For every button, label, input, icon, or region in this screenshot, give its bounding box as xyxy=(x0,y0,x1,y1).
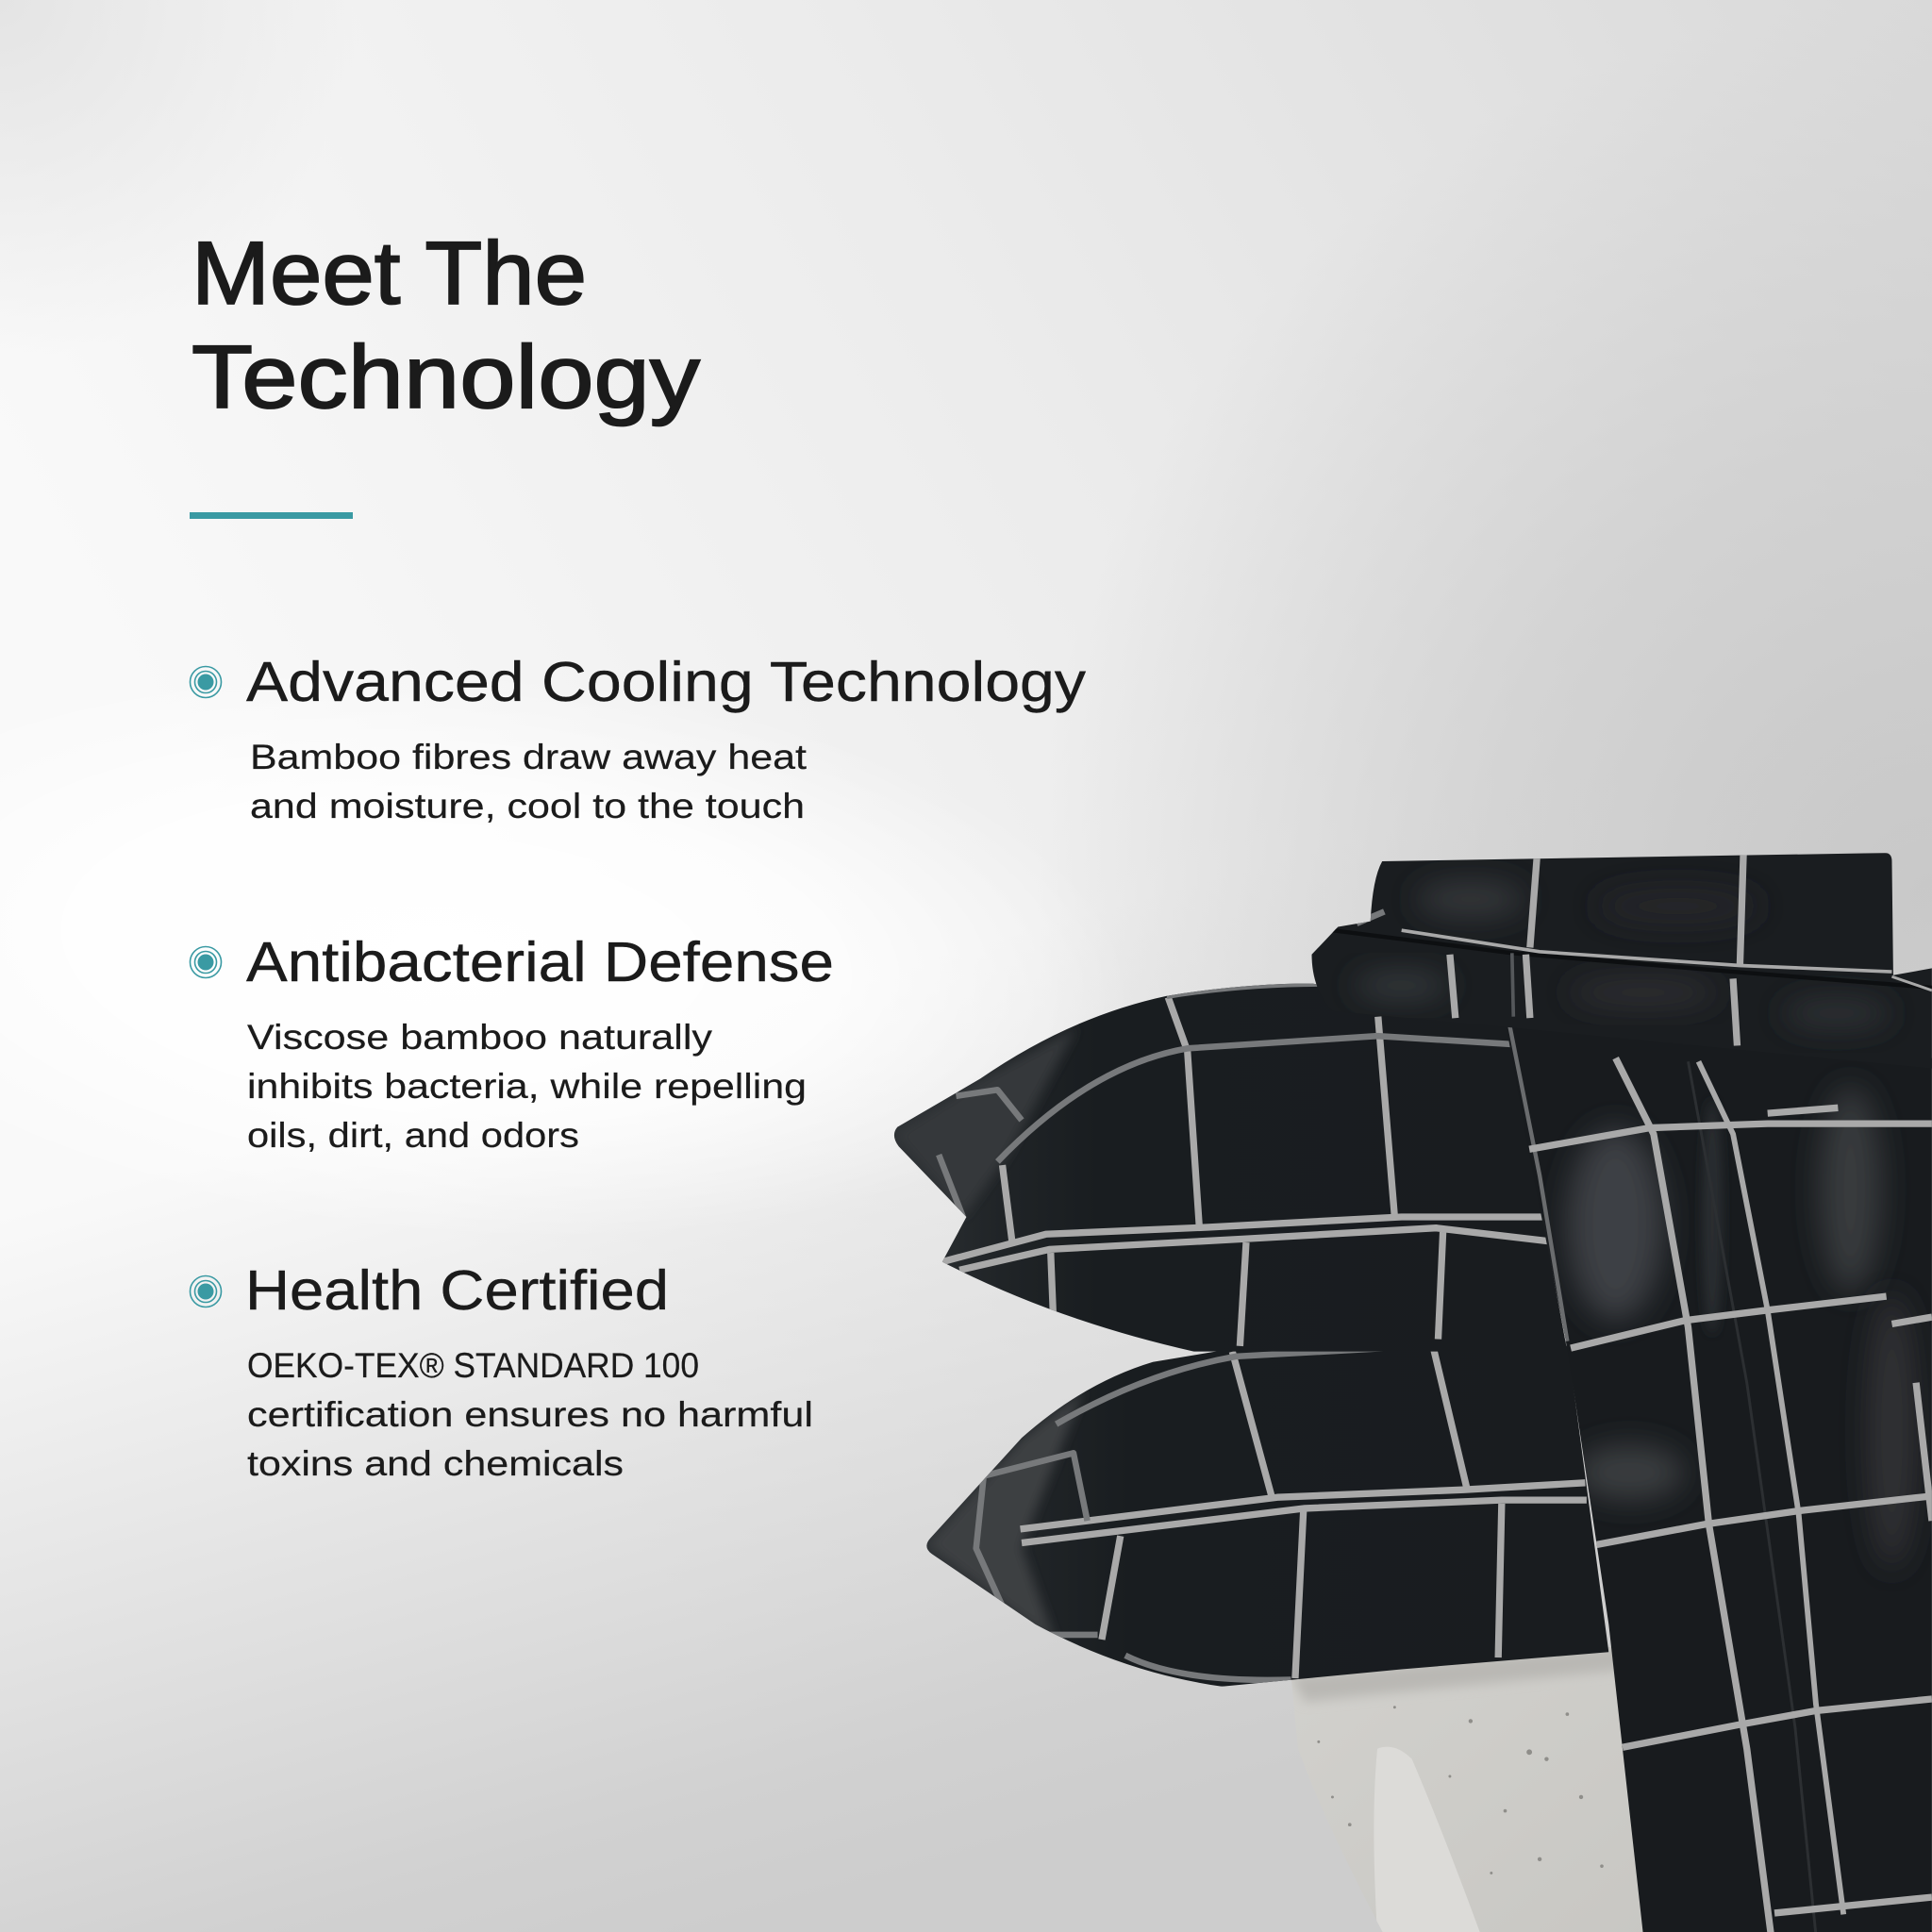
icon: teal target bullet xyxy=(191,1275,221,1307)
description: Bamboo fibres draw away heat xyxy=(250,738,808,776)
description xyxy=(250,738,808,825)
description: and moisture, cool to the touch xyxy=(250,787,805,825)
description: oils, dirt, and odors xyxy=(247,1116,579,1155)
description: toxins and chemicals xyxy=(247,1444,624,1483)
feature: health certified xyxy=(191,1259,813,1483)
feature: advanced cooling technology xyxy=(191,651,1087,825)
title xyxy=(192,224,701,427)
description: Viscose bamboo naturally xyxy=(247,1018,713,1057)
heading: Health Certified xyxy=(245,1259,669,1322)
description: inhibits bacteria, while repelling xyxy=(247,1067,807,1106)
title accent bar xyxy=(190,512,353,519)
title: Technology xyxy=(192,327,701,427)
heading: Advanced Cooling Technology xyxy=(246,651,1087,713)
description xyxy=(247,1346,813,1483)
product photo: bedding stack on stone stool xyxy=(891,847,1932,1932)
upper pillow xyxy=(891,978,1581,1358)
description xyxy=(247,1018,807,1155)
draped sheet xyxy=(1498,1009,1932,1932)
folded sheets on top xyxy=(1305,847,1932,1075)
stone stool xyxy=(1291,1645,1657,1932)
lower pillow xyxy=(918,1334,1623,1693)
heading: Antibacterial Defense xyxy=(246,931,834,993)
feature: antibacterial defense xyxy=(191,931,834,1155)
icon: teal target bullet xyxy=(191,947,221,977)
description: certification ensures no harmful xyxy=(247,1395,813,1434)
description: OEKO-TEX® STANDARD 100 xyxy=(247,1346,699,1385)
title: Meet The xyxy=(192,224,587,324)
icon: teal target bullet xyxy=(191,666,221,698)
